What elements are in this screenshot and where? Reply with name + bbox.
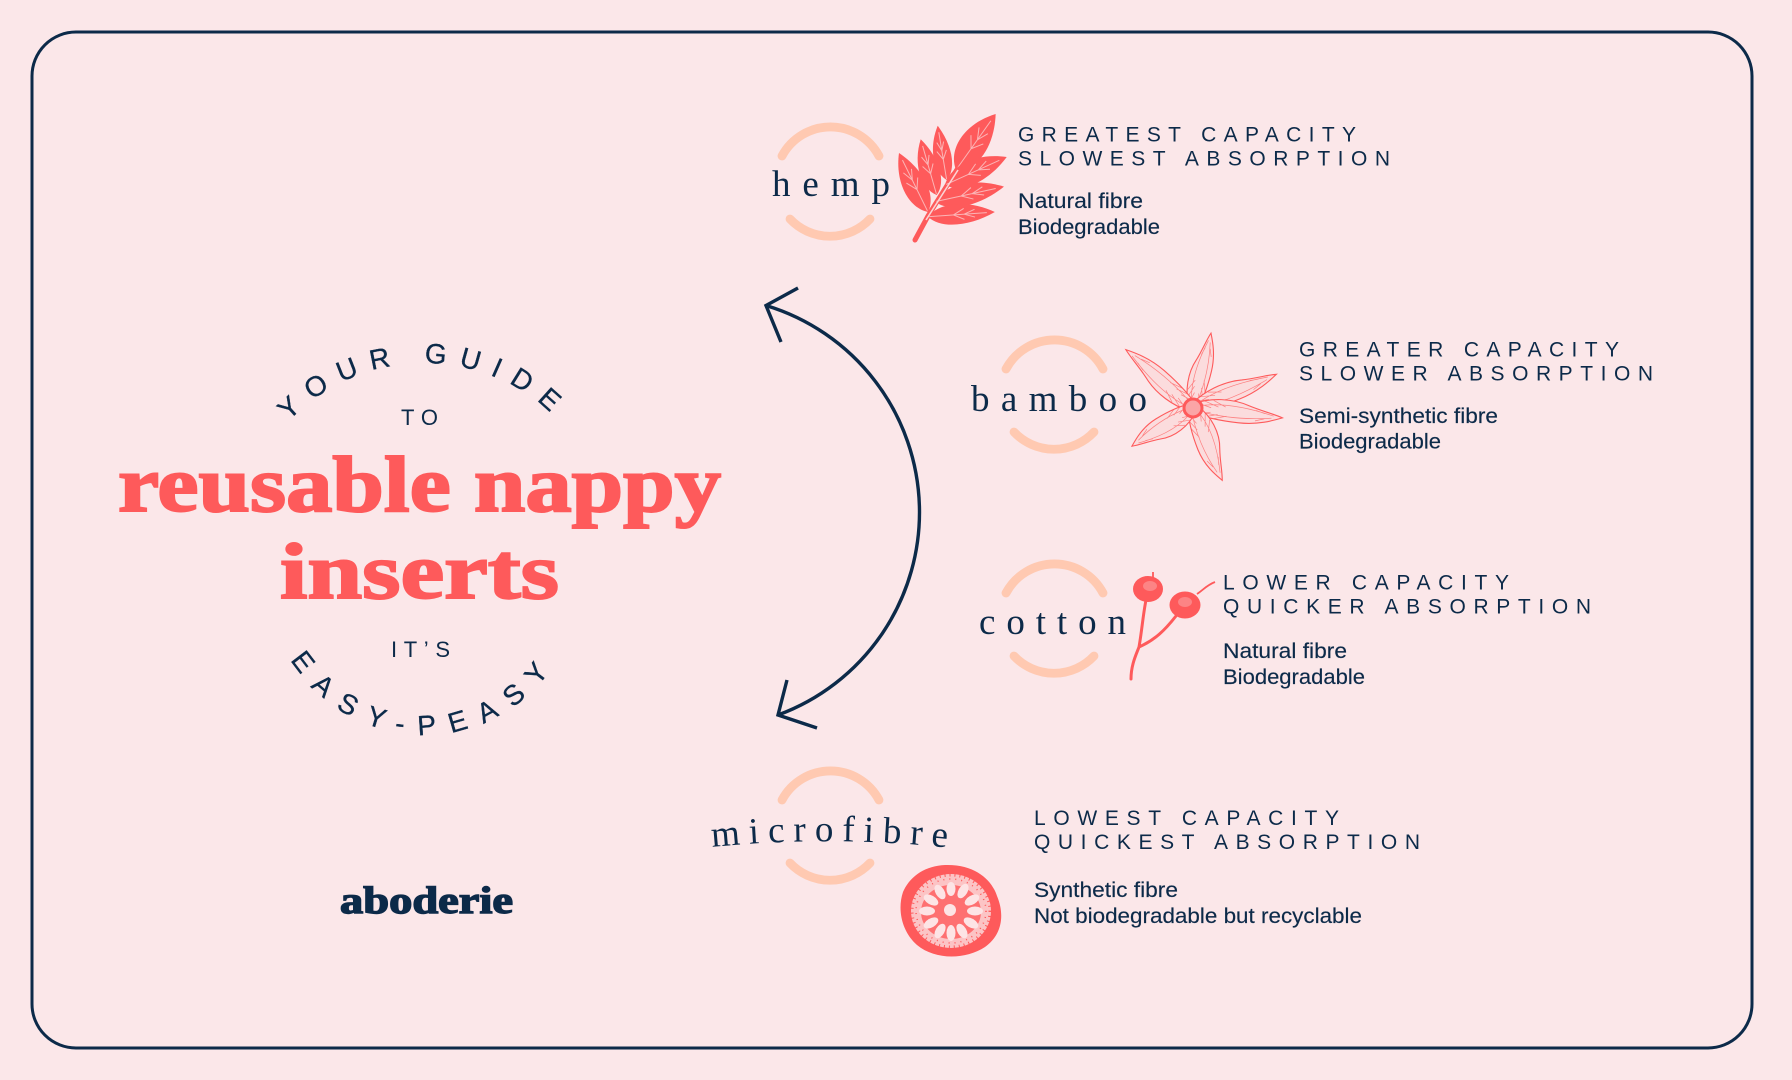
- microfibre label: microfibre: [711, 816, 947, 848]
- hemp properties heading: SLOWEST ABSORPTION: [1018, 148, 1390, 170]
- panel: bamboo: [971, 331, 1653, 484]
- cotton properties heading: QUICKER ABSORPTION: [1223, 596, 1591, 618]
- bamboo description: Semi-synthetic fibre: [1299, 404, 1498, 428]
- icon: hemp leaf: [888, 106, 1011, 240]
- bamboo label: bamboo: [971, 379, 1147, 420]
- hemp properties heading: [1018, 124, 1390, 170]
- small text: it's: IT’S: [391, 637, 450, 662]
- panel: cotton: [979, 564, 1591, 689]
- hemp properties heading: GREATEST CAPACITY: [1018, 124, 1356, 146]
- hemp description: Natural fibre: [1018, 189, 1143, 213]
- main title: inserts: [280, 529, 559, 616]
- microfibre description: Synthetic fibre: [1034, 878, 1178, 902]
- hemp description: [1018, 189, 1160, 239]
- curved heading: your guide: YOUR GUIDE: [276, 344, 562, 416]
- double-headed curved arrow: [766, 288, 919, 728]
- hemp description: Biodegradable: [1018, 215, 1160, 239]
- title block: [118, 344, 722, 736]
- cotton label: cotton: [979, 602, 1126, 643]
- panel: microfibre: [711, 766, 1420, 956]
- bamboo description: Biodegradable: [1299, 430, 1441, 454]
- bamboo properties heading: GREATER CAPACITY: [1299, 338, 1619, 362]
- icon: bamboo flower: [1118, 331, 1284, 484]
- main title: [118, 442, 721, 616]
- cotton properties heading: LOWER CAPACITY: [1223, 572, 1509, 594]
- main title: reusable nappy: [118, 442, 721, 529]
- microfibre properties heading: LOWEST CAPACITY: [1034, 807, 1339, 830]
- bamboo ring: [1006, 340, 1103, 449]
- small text: to: TO: [401, 405, 438, 430]
- microfibre properties heading: [1034, 807, 1420, 854]
- microfibre properties heading: QUICKEST ABSORPTION: [1034, 831, 1420, 854]
- hemp label: hemp: [772, 164, 890, 205]
- bamboo description: [1299, 404, 1498, 454]
- microfibre description: [1034, 878, 1362, 928]
- bamboo properties heading: SLOWER ABSORPTION: [1299, 362, 1653, 386]
- icon: fruit cross-section: [901, 865, 1001, 957]
- hemp ring: [782, 127, 879, 236]
- cotton ring: [1006, 564, 1103, 673]
- brand logo: aboderie: aboderie: [340, 880, 513, 922]
- cotton description: Natural fibre: [1223, 639, 1347, 663]
- bamboo properties heading: [1299, 338, 1653, 386]
- icon: cotton berries: [1131, 572, 1215, 679]
- panel: hemp: [772, 106, 1390, 240]
- cotton description: Biodegradable: [1223, 665, 1365, 689]
- cotton description: [1223, 639, 1365, 689]
- cotton properties heading: [1223, 572, 1591, 618]
- microfibre ring: [782, 771, 879, 880]
- curved text: easy-peasy: EASY-PEASY: [291, 650, 545, 736]
- microfibre description: Not biodegradable but recyclable: [1034, 904, 1362, 928]
